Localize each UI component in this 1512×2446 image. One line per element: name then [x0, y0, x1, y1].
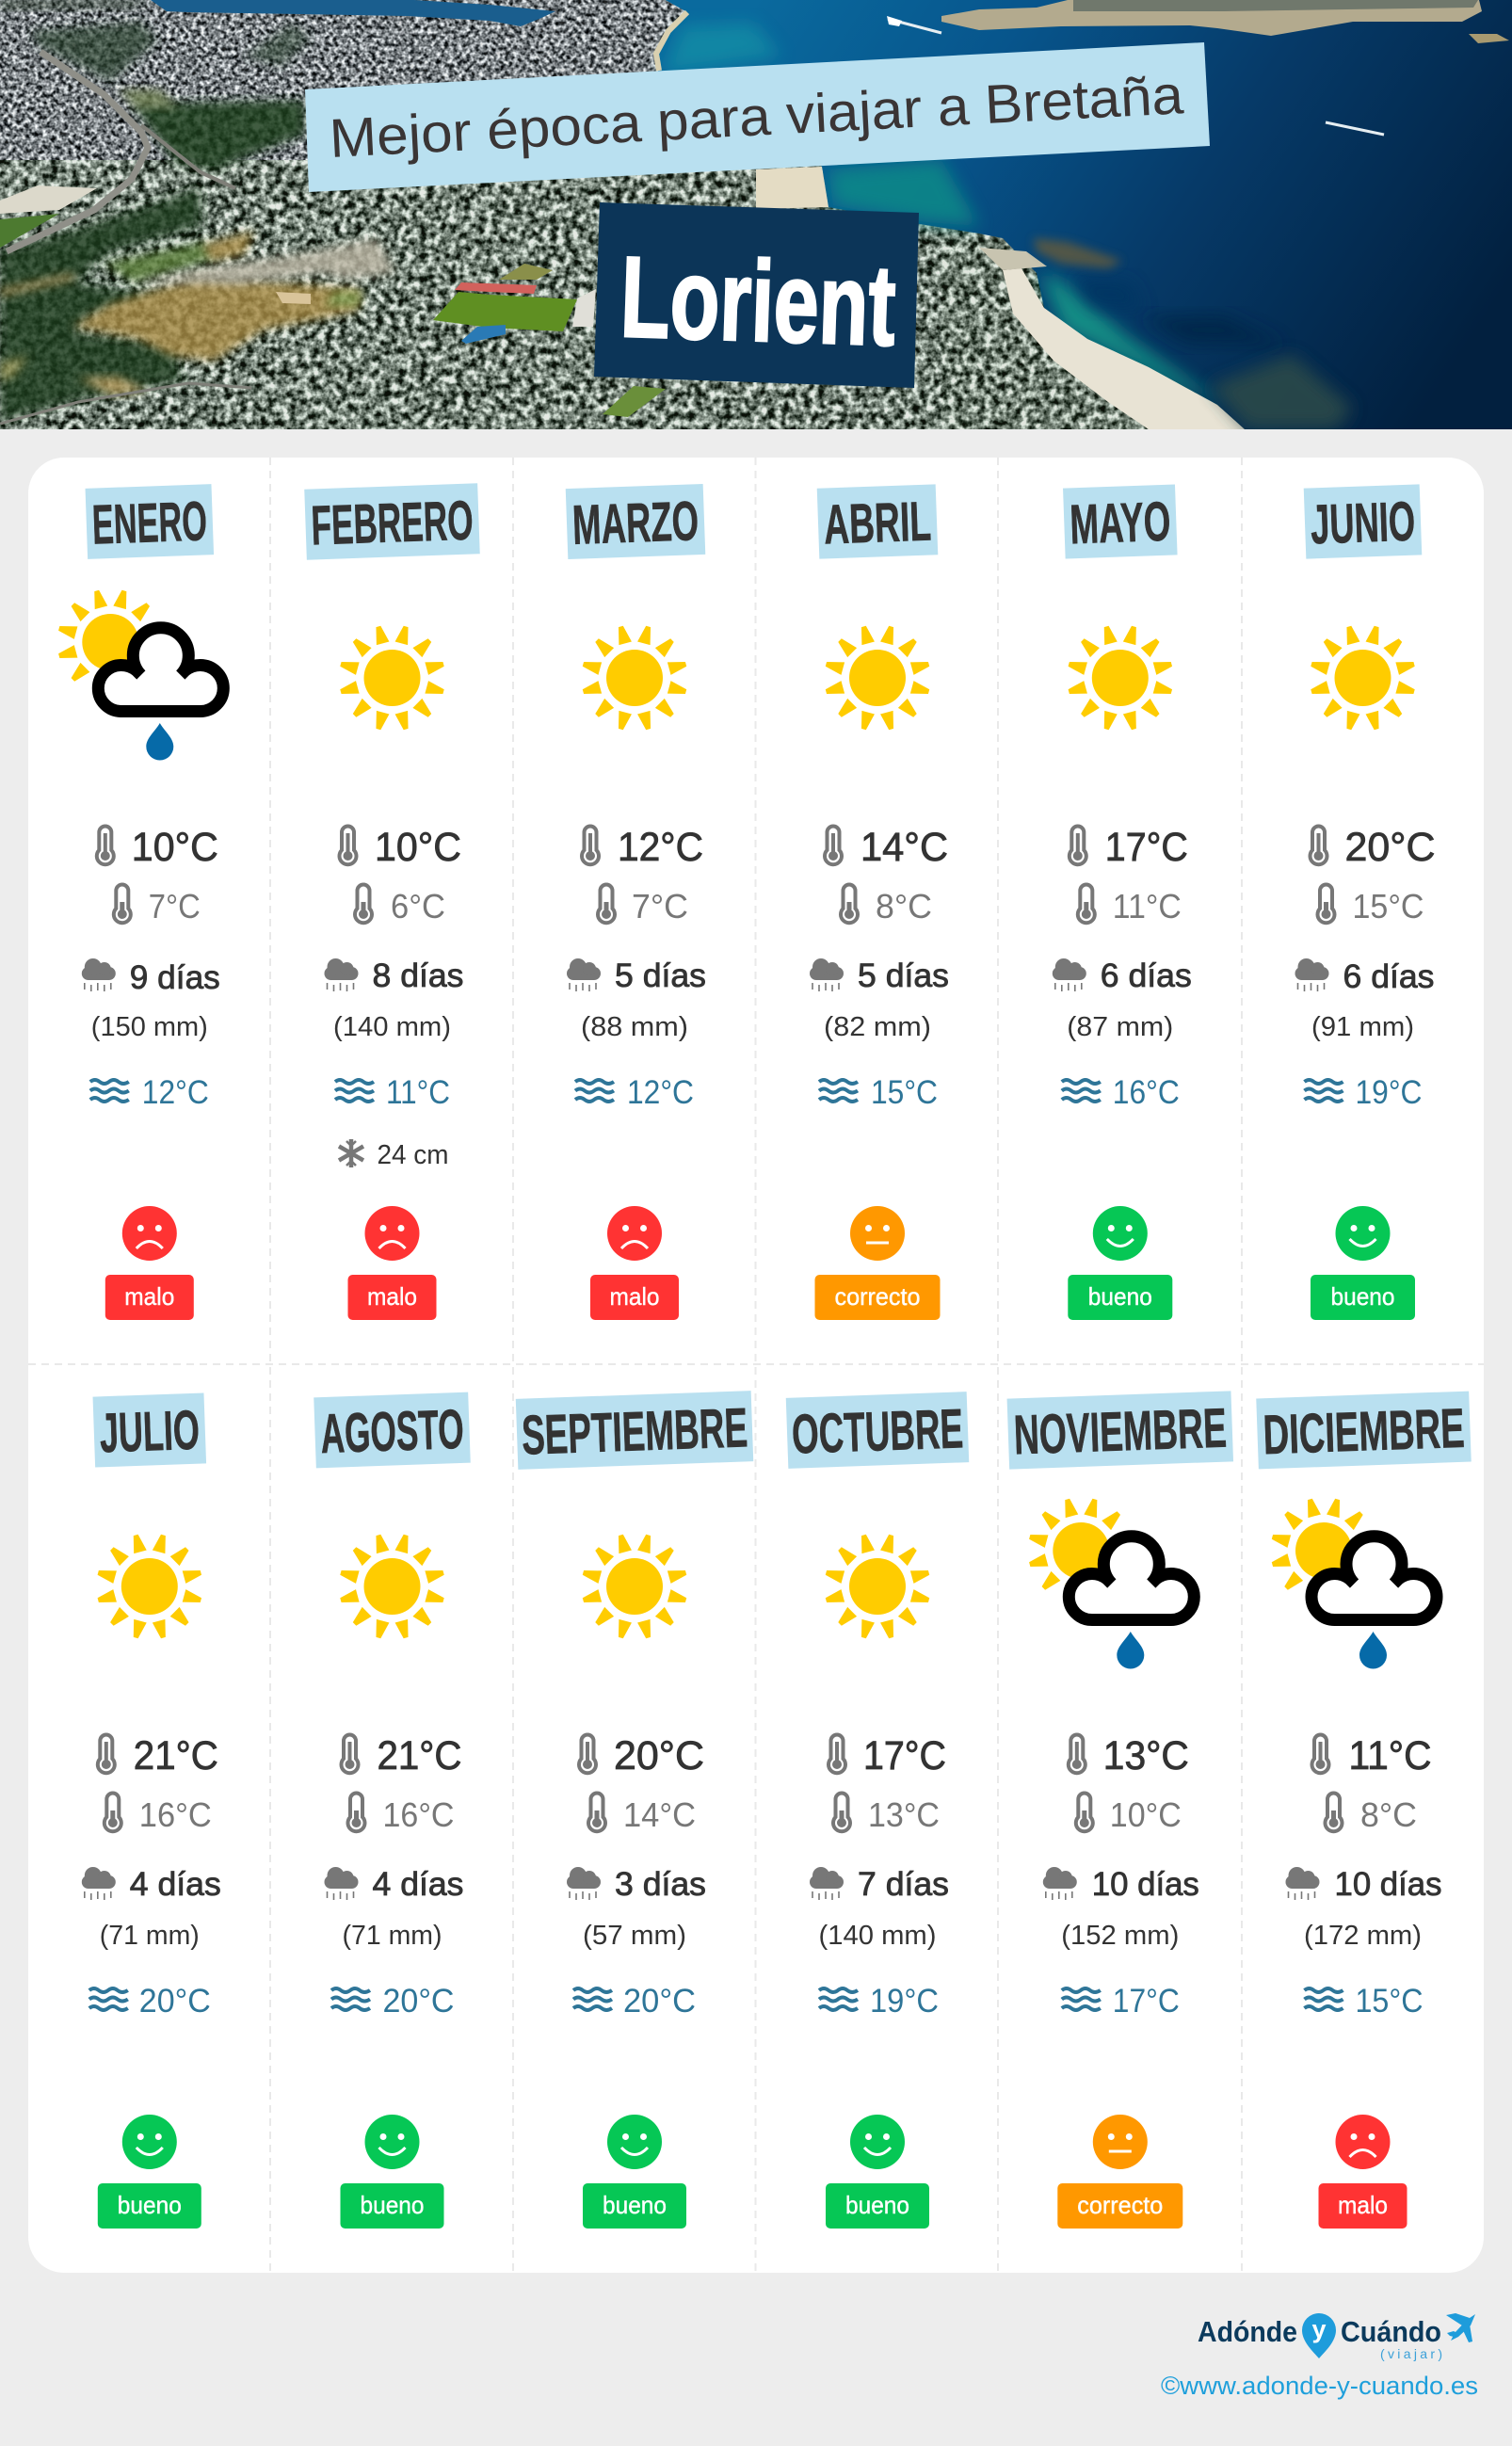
rain days: 4 días [373, 1866, 463, 1903]
icon: sea waves [1062, 1080, 1101, 1102]
max temperature: 17°C [1105, 825, 1188, 870]
sea temperature: 20°C [623, 1983, 696, 2020]
icon: sad face [1335, 2115, 1390, 2169]
icon: rain [324, 1867, 358, 1900]
min temperature: 7°C [149, 887, 201, 925]
min temperature: 16°C [382, 1795, 454, 1834]
icon: sea waves [1305, 1080, 1343, 1102]
month label [516, 1391, 753, 1470]
rating badge [348, 1275, 437, 1320]
icon: rain [82, 958, 116, 991]
icon: thermometer high [98, 1734, 115, 1773]
icon: neutral face [850, 1206, 905, 1261]
month label: SEPTIEMBRE [521, 1396, 748, 1467]
panel: febrero [304, 483, 480, 1320]
rating badge: bueno [1088, 1282, 1152, 1311]
icon: happy face [850, 2115, 905, 2169]
month label: AGOSTO [319, 1398, 465, 1465]
icon: thermometer high [579, 1734, 596, 1773]
rain days: 4 días [130, 1866, 221, 1903]
icon: sun with rain cloud [57, 589, 223, 761]
icon: happy face [1093, 1206, 1148, 1261]
max temperature: 10°C [375, 825, 461, 870]
icon: rain [324, 958, 358, 991]
max temperature: 20°C [614, 1733, 704, 1778]
month label [566, 484, 705, 559]
icon: thermometer high [1069, 1734, 1086, 1773]
icon: sea waves [819, 1080, 858, 1102]
rain days: 6 días [1101, 957, 1192, 994]
rain days: 5 días [858, 957, 949, 994]
icon: sun [825, 625, 930, 731]
icon: sun [582, 625, 687, 731]
month label: MARZO [571, 490, 700, 556]
icon: thermometer low [1326, 1793, 1343, 1831]
month label [86, 484, 214, 559]
rainfall: (71 mm) [343, 1921, 442, 1951]
rating badge: malo [1338, 2191, 1388, 2219]
sea temperature: 17°C [1113, 1983, 1180, 2020]
icon: snowflake [339, 1139, 363, 1167]
icon: rain [810, 958, 844, 991]
min temperature: 14°C [623, 1795, 696, 1834]
panel: agosto [314, 1392, 471, 2229]
panel: diciembre [1256, 1392, 1472, 2229]
icon: rain [567, 1867, 601, 1900]
panel: julio [82, 1392, 221, 2229]
icon: sun [1067, 625, 1173, 731]
icon: thermometer low [841, 885, 858, 923]
rating badge [1068, 1275, 1172, 1320]
icon: sea waves [1305, 1988, 1343, 2010]
max temperature: 11°C [1348, 1733, 1431, 1778]
icon: happy face [607, 2115, 662, 2169]
icon: sea waves [575, 1080, 614, 1102]
icon: sad face [365, 1206, 420, 1261]
city name banner [594, 202, 919, 388]
max temperature: 14°C [861, 825, 948, 870]
min temperature: 16°C [139, 1795, 212, 1834]
rating badge: malo [610, 1282, 659, 1311]
icon: thermometer high [1070, 827, 1086, 864]
max temperature: 20°C [1344, 825, 1435, 870]
max temperature: 21°C [134, 1733, 218, 1778]
icon: sad face [122, 1206, 177, 1261]
rain days: 10 días [1335, 1866, 1442, 1903]
min temperature: 13°C [868, 1795, 940, 1834]
rain days: 3 días [615, 1866, 706, 1903]
rainfall: (87 mm) [1067, 1012, 1173, 1042]
snowfall [339, 1139, 448, 1170]
icon: sea waves [90, 1080, 129, 1102]
icon: sun with rain cloud [1271, 1498, 1437, 1668]
icon: happy face [365, 2115, 420, 2169]
icon: thermometer low [588, 1793, 605, 1831]
month label: MAYO [1069, 491, 1171, 555]
icon: sun [1310, 625, 1416, 731]
icon: rain [1043, 1867, 1077, 1900]
logo word: Cuándo: Cuándo [1341, 2315, 1441, 2348]
rating badge: bueno [118, 2191, 182, 2219]
rain days: 9 días [130, 959, 220, 996]
icon: sea waves [331, 1988, 370, 2010]
panel: octubre [786, 1392, 969, 2229]
rating badge [815, 1275, 940, 1320]
snow depth: 24 cm [377, 1140, 448, 1170]
max temperature: 21°C [377, 1733, 461, 1778]
sea temperature: 15°C [871, 1074, 938, 1111]
sea temperature: 15°C [1356, 1983, 1424, 2020]
title text: Mejor época para viajar a Bretaña [328, 64, 1185, 169]
icon: happy face [1335, 1206, 1390, 1261]
month label: ENERO [91, 490, 208, 556]
icon: rain [567, 958, 601, 991]
icon: thermometer high [582, 827, 599, 864]
max temperature: 10°C [132, 825, 218, 870]
icon: thermometer high [341, 1734, 358, 1773]
month label [1304, 484, 1422, 559]
min temperature: 8°C [1360, 1795, 1417, 1834]
rating badge: bueno [360, 2191, 424, 2219]
rainfall: (140 mm) [333, 1012, 451, 1042]
icon: thermometer low [105, 1793, 121, 1831]
rating badge: bueno [1331, 1282, 1395, 1311]
min temperature: 10°C [1110, 1795, 1182, 1834]
icon: sun [339, 1534, 445, 1639]
rainfall: (57 mm) [583, 1921, 686, 1951]
sea temperature: 19°C [1356, 1074, 1422, 1111]
min temperature: 6°C [391, 887, 445, 925]
max temperature: 12°C [618, 825, 703, 870]
month label [786, 1392, 969, 1469]
icon: thermometer high [825, 827, 842, 864]
rating badge [98, 2183, 201, 2229]
sea temperature: 11°C [386, 1074, 450, 1111]
rainfall: (88 mm) [581, 1012, 688, 1042]
rainfall: (150 mm) [91, 1012, 208, 1042]
icon: thermometer high [828, 1734, 845, 1773]
icon: sun with rain cloud [1028, 1498, 1194, 1668]
sea temperature: 20°C [382, 1983, 454, 2020]
rainfall: (71 mm) [100, 1921, 200, 1951]
icon: thermometer low [355, 885, 372, 923]
month label: NOVIEMBRE [1013, 1397, 1228, 1466]
icon: thermometer low [1078, 885, 1095, 923]
icon: happy face [122, 2115, 177, 2169]
rain days: 6 días [1343, 958, 1435, 995]
rainfall: (172 mm) [1304, 1921, 1422, 1951]
icon: thermometer high [1312, 1734, 1329, 1773]
month label: JULIO [99, 1399, 201, 1464]
panel: enero [57, 484, 223, 1320]
panel: noviembre [1007, 1391, 1233, 2229]
month label [1063, 484, 1178, 559]
rating badge [583, 2183, 686, 2229]
month label [1007, 1391, 1233, 1470]
icon: sea waves [819, 1988, 858, 2010]
icon: rain [1295, 958, 1329, 991]
icon: sea waves [1062, 1988, 1101, 2010]
rainfall: (152 mm) [1061, 1921, 1179, 1951]
rating badge [105, 1275, 194, 1320]
panel: mayo [1053, 484, 1192, 1320]
icon: thermometer low [598, 885, 615, 923]
sea temperature: 19°C [870, 1983, 939, 2020]
rating badge: bueno [603, 2191, 667, 2219]
header photo: aerial view of Lorient coast [0, 0, 1512, 429]
icon: thermometer low [348, 1793, 365, 1831]
panel: septiembre [516, 1391, 753, 2229]
rain days: 8 días [373, 957, 463, 994]
icon: thermometer high [97, 827, 114, 864]
min temperature: 15°C [1352, 887, 1424, 925]
icon: map pin with y: y [1311, 2315, 1327, 2343]
title banner [305, 42, 1210, 192]
rating badge [590, 1275, 679, 1320]
min temperature: 11°C [1113, 887, 1182, 925]
month label: ABRIL [823, 491, 932, 555]
rating badge: malo [367, 1282, 417, 1311]
max temperature: 13°C [1103, 1733, 1189, 1778]
rainfall: (82 mm) [824, 1012, 931, 1042]
icon: plane [1446, 2313, 1475, 2342]
icon: rain [1286, 1867, 1320, 1900]
icon: thermometer high [1311, 827, 1327, 864]
month label: FEBRERO [310, 490, 475, 556]
month label: OCTUBRE [791, 1397, 964, 1466]
sea temperature: 16°C [1113, 1074, 1180, 1111]
sea temperature: 12°C [627, 1074, 694, 1111]
icon: rain [1053, 958, 1086, 991]
panel: junio [1295, 484, 1435, 1320]
icon: sea waves [573, 1988, 612, 2010]
icon: sun [339, 625, 445, 731]
icon: sea waves [89, 1988, 128, 2010]
rainfall: (140 mm) [818, 1921, 937, 1951]
rating badge [1318, 2183, 1407, 2229]
rainfall: (91 mm) [1311, 1012, 1414, 1042]
rating badge [826, 2183, 929, 2229]
rain days: 5 días [615, 957, 706, 994]
icon: thermometer low [114, 885, 131, 923]
panel: abril [810, 484, 949, 1320]
rain days: 7 días [858, 1866, 949, 1903]
icon: rain [82, 1867, 116, 1900]
icon: sun [96, 1534, 202, 1639]
icon: map pin with y [1302, 2313, 1336, 2358]
icon: neutral face [1093, 2115, 1148, 2169]
min temperature: 8°C [876, 887, 932, 925]
rating badge: correcto [834, 1282, 921, 1311]
website credit: ©www.adonde-y-cuando.es [1161, 2372, 1478, 2400]
month label [817, 484, 938, 559]
rating badge [1311, 1275, 1415, 1320]
main white card [28, 458, 1484, 2273]
rating badge: correcto [1077, 2191, 1163, 2219]
logo word: Adónde: Adónde [1198, 2315, 1297, 2348]
icon: sun [582, 1534, 687, 1639]
icon: sad face [607, 1206, 662, 1261]
panel: marzo [566, 484, 706, 1320]
month label [314, 1392, 471, 1468]
rain days: 10 días [1092, 1866, 1199, 1903]
footer logo [1198, 2313, 1475, 2361]
month label: JUNIO [1310, 491, 1416, 555]
rating badge: bueno [845, 2191, 909, 2219]
rating badge: malo [124, 1282, 174, 1311]
icon: thermometer low [1318, 885, 1335, 923]
min temperature: 7°C [632, 887, 688, 925]
month label [93, 1392, 206, 1468]
icon: sun [825, 1534, 930, 1639]
icon: thermometer low [1076, 1793, 1093, 1831]
rating badge [341, 2183, 444, 2229]
city name: Lorient [619, 233, 897, 370]
icon: thermometer low [833, 1793, 850, 1831]
icon: rain [810, 1867, 844, 1900]
sea temperature: 20°C [139, 1983, 211, 2020]
icon: sea waves [335, 1080, 374, 1102]
logo word: viajar: (viajar) [1380, 2346, 1442, 2361]
rating badge [1057, 2183, 1182, 2229]
sea temperature: 12°C [142, 1074, 209, 1111]
max temperature: 17°C [863, 1733, 946, 1778]
month label [304, 483, 480, 560]
icon: thermometer high [339, 827, 356, 864]
